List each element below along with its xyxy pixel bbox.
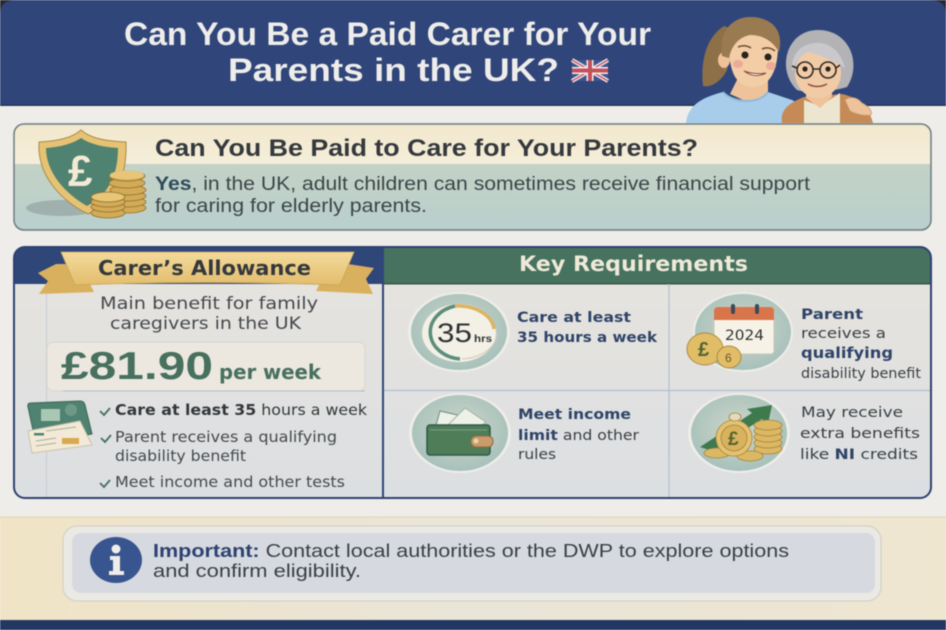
price box: £81.90 [61, 345, 213, 388]
icon: wallet [409, 393, 511, 473]
title [124, 16, 651, 88]
requirement: qualifying benefit [687, 292, 922, 382]
mother eyes and smile [802, 66, 831, 86]
callout text [153, 540, 789, 581]
mother hair back [786, 30, 853, 92]
text: disability benefit [801, 366, 922, 382]
text: qualifying [801, 344, 893, 362]
woman shirt [686, 92, 804, 123]
item: care at least 35 hours: Care at least 35 hours a week [115, 401, 367, 419]
requirement: extra benefits [688, 393, 920, 473]
icon: 35 hours dial: hrs [474, 334, 493, 345]
daughter's hand [845, 98, 871, 115]
mother glasses [792, 62, 840, 78]
subtitle: Main benefit for family [100, 294, 318, 314]
text [518, 407, 639, 463]
woman hair [721, 17, 780, 58]
item: income tests: Meet income and other tests [115, 473, 345, 491]
text [800, 405, 920, 463]
mother fringe [792, 43, 845, 72]
check list [100, 401, 367, 491]
panel: carer's allowance and requirements frame [14, 247, 931, 498]
mother collar [804, 93, 840, 123]
heading: key requirements: Key Requirements [519, 252, 748, 276]
ribbon: carer's allowance [38, 252, 374, 294]
footer band [0, 517, 946, 621]
body text [155, 174, 811, 217]
header band [0, 0, 946, 106]
item: qualifying disability benefit [101, 428, 337, 465]
text: rules [518, 447, 556, 463]
requirement: 35 hours [408, 292, 657, 372]
requirement: income limit [409, 393, 639, 473]
text: Meet income [518, 407, 631, 423]
icon: calendar and coins: £ [698, 339, 709, 361]
icon: calendar and coins [687, 292, 793, 372]
woman ponytail [702, 26, 728, 87]
grid lines [384, 284, 930, 497]
woman face [729, 34, 778, 87]
subtitle: caregivers in the UK [110, 314, 302, 334]
text [517, 310, 657, 346]
callout: important [63, 526, 881, 601]
text: receives a [801, 326, 886, 342]
mother cardigan [782, 94, 873, 123]
mother face [795, 48, 841, 98]
body text: Yes, in the UK, adult children can sometimes receive financial support [155, 174, 811, 195]
panel: can you be paid [14, 124, 931, 230]
text: like NI credits [800, 447, 918, 463]
woman features [733, 46, 776, 76]
text: limit and other [518, 428, 639, 444]
bottom bar [0, 620, 946, 630]
icon: shield with pound and coins [26, 130, 146, 218]
icon: 35 hours dial: 35 [437, 318, 472, 348]
illustration: daughter and mother [686, 17, 873, 123]
mother neck [805, 92, 833, 108]
icon: 35 hours dial [408, 292, 510, 372]
icon: shield with pound and coins: £ [68, 147, 93, 196]
icon: banknote and card [28, 401, 92, 453]
item: qualifying disability benefit: Parent receives a qualifying [115, 428, 337, 446]
text: May receive [801, 405, 903, 421]
icon: calendar and coins: 6 [725, 351, 732, 365]
price box [47, 342, 365, 391]
icon: coins and growth arrow [688, 393, 790, 473]
item: qualifying disability benefit: disability benefit [115, 447, 246, 465]
woman neck [730, 79, 769, 101]
icon: UK flag [572, 60, 608, 81]
text: Care at least [517, 310, 631, 326]
price box: per week [219, 360, 322, 384]
title: Parents in the UK? [228, 52, 559, 88]
icon: coins and growth arrow: £ [728, 429, 739, 450]
text [801, 307, 922, 382]
ribbon: carer's allowance: Carer’s Allowance [98, 256, 311, 280]
body text: for caring for elderly parents. [155, 196, 427, 217]
icon: calendar and coins: 2024 [725, 328, 764, 344]
title: Can You Be a Paid Carer for Your [124, 16, 651, 52]
callout text: and confirm eligibility. [153, 560, 361, 581]
heading: Can You Be Paid to Care for Your Parents? [155, 135, 698, 162]
callout text: Important: Contact local authorities or the DWP to explore options [153, 540, 789, 561]
text: 35 hours a week [517, 330, 657, 346]
icon: info [90, 537, 142, 583]
subtitle [100, 294, 318, 334]
text: extra benefits [800, 426, 920, 442]
text: Parent [801, 307, 863, 323]
